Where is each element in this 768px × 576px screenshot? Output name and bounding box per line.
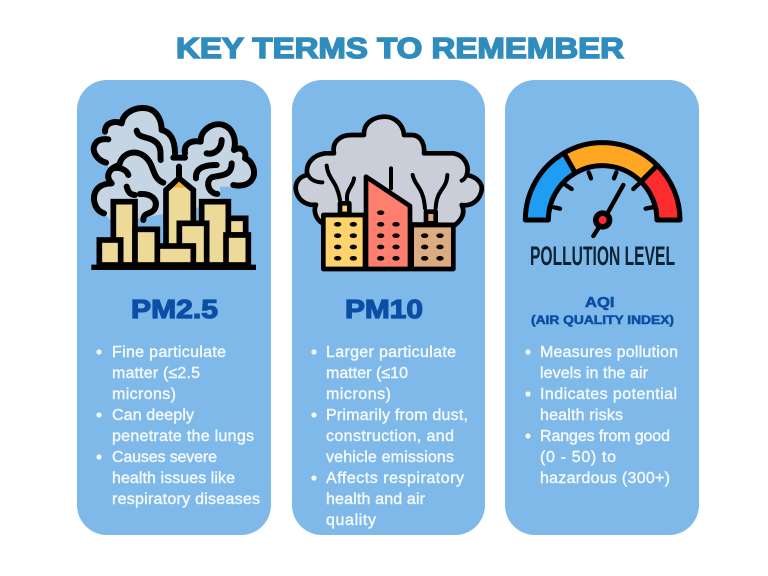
panel: AQI (505, 80, 699, 535)
bullet list: PM2.5: respiratory diseases (112, 491, 260, 508)
bullet list: PM10: matter (≤10 (326, 365, 408, 382)
bullet list: PM10: Larger particulate (326, 344, 456, 361)
bullet list: AQI: (0 - 50) to (540, 449, 616, 466)
bullet list: PM2.5: penetrate the lungs (112, 428, 254, 445)
panel: PM10 (292, 80, 485, 535)
bullet list: PM2.5: Can deeply (112, 407, 194, 424)
bullet list: PM2.5: microns) (112, 386, 176, 403)
heading: PM2.5: PM2.5 (131, 294, 218, 324)
bullet list: PM2.5: Causes severe (112, 449, 217, 466)
subheading: air quality index: (AIR QUALITY INDEX) (531, 315, 674, 327)
bullet list: PM10: microns) (326, 386, 391, 403)
icon: smog over city skyline (91, 108, 256, 267)
bullet list: PM2.5: health issues like (112, 470, 235, 487)
heading: AQI: AQI (585, 295, 614, 311)
bullet list: AQI: Measures pollution (540, 344, 678, 361)
bullet list: AQI: hazardous (300+) (540, 470, 670, 487)
bullet list: PM10: Affects respiratory (326, 470, 464, 487)
bullet list: PM10: Primarily from dust, (326, 407, 468, 424)
bullet list: AQI: levels in the air (540, 365, 649, 382)
bullet list: PM10: health and air (326, 491, 426, 508)
icon: factories under smoke cloud (296, 117, 482, 269)
bullet list: PM10: quality (326, 512, 376, 529)
icon: pollution level gauge (525, 143, 680, 236)
bullet list: AQI: Ranges from good (540, 428, 670, 445)
bullet list: PM10: construction, and (326, 428, 454, 445)
panel: PM2.5 (77, 80, 271, 535)
bullet list: PM2.5: Fine particulate (112, 344, 226, 361)
heading: PM10: PM10 (345, 294, 423, 324)
bullet list: AQI: Indicates potential (540, 386, 677, 403)
bullet list: AQI: health risks (540, 407, 623, 424)
bullet list: PM2.5: matter (≤2.5 (112, 365, 200, 382)
bullet list: PM2.5 (96, 344, 260, 508)
bullet list: AQI (525, 344, 678, 487)
bullet list: PM10: vehicle emissions (326, 449, 454, 466)
title: KEY TERMS TO REMEMBER (176, 33, 624, 65)
bullet list: PM10 (311, 344, 468, 529)
